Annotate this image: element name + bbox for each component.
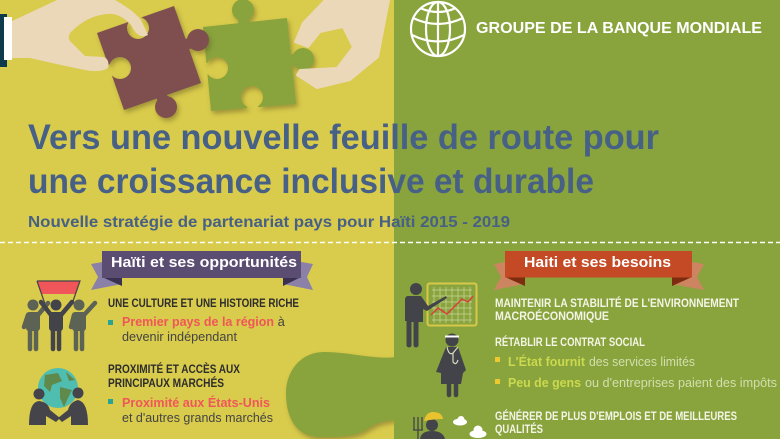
text block: jobs (495, 410, 737, 436)
icon: right hand (295, 0, 389, 88)
puzzle tab joining the panels (286, 352, 396, 437)
text block: market access: et d'autres grands marchés (122, 410, 273, 425)
text block: culture: UNE CULTURE ET UNE HISTOIRE RICHE (108, 298, 299, 310)
text block: jobs: GÉNÉRER DE PLUS D'EMPLOIS ET DE MEILLEURES (495, 410, 737, 423)
icon: clouds (453, 416, 486, 438)
ribbon: opportunities (91, 251, 313, 290)
text block: market access: Proximité aux États-Unis (122, 395, 270, 410)
icon: brown puzzle piece (97, 6, 209, 118)
text block: social contract (495, 336, 777, 390)
icon: green puzzle piece (203, 0, 314, 111)
background: green panel (394, 0, 780, 439)
ribbon: needs (494, 251, 704, 290)
text block: macroeconomic stability: MACROÉCONOMIQUE (495, 310, 609, 323)
text block: social contract: des services limités (589, 354, 695, 369)
icon: left hand (10, 0, 148, 71)
logo text: GROUPE DE LA BANQUE MONDIALE (476, 20, 762, 37)
illustration: hands joining puzzle pieces (0, 0, 389, 118)
title (28, 118, 659, 201)
text block: social contract: Peu de gens (508, 375, 581, 390)
text block: social contract: ou d'entreprises paient des impôts (585, 375, 777, 390)
text block: social contract: RÉTABLIR LE CONTRAT SOCIAL (495, 336, 645, 349)
ribbon: opportunities: Haïti et ses opportunités (111, 254, 297, 271)
ribbon: needs: Haiti et ses besoins (524, 254, 671, 271)
icon: farmer (413, 412, 445, 439)
icon: crowd with flag (24, 281, 95, 349)
text block: culture: devenir indépendant (122, 329, 237, 344)
text block: market access (108, 363, 273, 425)
text block: jobs: QUALITÉS (495, 423, 543, 436)
text block: market access: PROXIMITÉ ET ACCÈS AUX (108, 363, 240, 376)
text block: culture (108, 298, 299, 344)
title: une croissance inclusive et durable (28, 162, 594, 201)
text block: market access: PRINCIPAUX MARCHÉS (108, 377, 224, 390)
icon: presenter with chart (405, 283, 476, 345)
text block: macroeconomic stability: MAINTENIR LA STABILITÉ DE L'ENVIRONNEMENT (495, 297, 739, 310)
text block: macroeconomic stability (495, 297, 739, 323)
icon: globe and handshake (29, 368, 88, 425)
text block: social contract: L'État fournit (508, 354, 586, 369)
logo: World Bank globe (411, 2, 465, 56)
title: Vers une nouvelle feuille de route pour (28, 118, 659, 157)
subtitle: Nouvelle stratégie de partenariat pays pour Haïti 2015 - 2019 (28, 214, 510, 231)
icon: doctor (436, 334, 466, 395)
background: yellow panel (0, 0, 394, 439)
icon: shirt cuff (0, 14, 12, 67)
text block: culture: Premier pays de la région à (122, 314, 286, 329)
